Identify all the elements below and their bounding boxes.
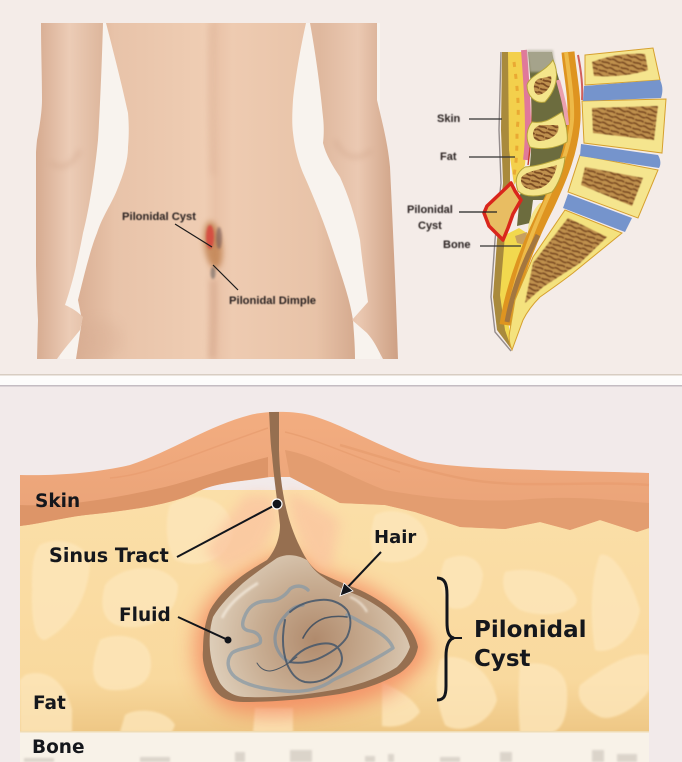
panel: back view of torso — [35, 23, 398, 360]
label: Pilonidal Cyst: Cyst — [418, 220, 442, 232]
skin layer — [20, 412, 649, 532]
panel: spine cross-section — [407, 48, 666, 351]
bone edge — [20, 731, 649, 732]
hair strands — [228, 586, 393, 691]
cyst lesion — [201, 220, 225, 279]
label: Pilonidal Cyst — [474, 617, 587, 672]
right arm — [310, 23, 398, 359]
red muscle line — [528, 60, 532, 165]
torso shading — [208, 280, 218, 359]
label: Pilonidal Cyst: Cyst — [474, 646, 531, 672]
label: Pilonidal Cyst: Pilonidal — [407, 204, 453, 216]
fat dots — [514, 62, 518, 175]
fat layer — [20, 490, 649, 732]
label: Pilonidal Cyst: Pilonidal — [474, 617, 587, 643]
label: Skin — [437, 113, 502, 125]
vertebra marrow — [525, 54, 658, 303]
fluid highlights — [222, 583, 367, 618]
label: Pilonidal Cyst — [407, 204, 497, 232]
dark tissue upper — [517, 52, 569, 226]
elbow shading — [345, 154, 364, 158]
label: Bone: Bone — [443, 239, 470, 251]
label: Fat — [440, 151, 515, 163]
fatty bulge right of tract — [287, 490, 340, 570]
label: Sinus Tract — [49, 499, 282, 567]
label: Fluid — [119, 605, 232, 644]
label: Fat: Fat — [33, 693, 66, 714]
sacral bone inset — [528, 203, 548, 238]
lower fat layer — [500, 228, 533, 350]
bracket — [437, 578, 454, 700]
label: Bone — [443, 239, 521, 251]
label: Skin: Skin — [35, 491, 80, 512]
vertebra bodies — [509, 48, 666, 350]
sinus tract and cyst wall — [203, 412, 418, 702]
label: Skin: Skin — [437, 113, 461, 125]
bracket tip — [452, 637, 462, 639]
skin darker lower band right — [285, 450, 649, 532]
inflammation glow — [195, 555, 430, 715]
label: Hair: Hair — [374, 527, 416, 548]
spinous processes — [516, 60, 567, 196]
panel: skin cross-section — [20, 412, 649, 762]
label: Pilonidal Dimple: Pilonidal Dimple — [229, 295, 316, 307]
cyst — [484, 183, 521, 240]
label: Hair — [340, 527, 416, 596]
label: Pilonidal Cyst — [122, 211, 212, 247]
cyst fluid — [210, 555, 410, 697]
coccyx marrow — [515, 232, 527, 245]
outer skin line — [491, 52, 511, 351]
skin layer — [493, 52, 512, 350]
bone flecks — [24, 750, 637, 762]
tissue fade top — [527, 50, 556, 72]
fatty bulge left of tract — [205, 495, 278, 572]
elbow shading — [60, 153, 79, 168]
label: Sinus Tract: Sinus Tract — [49, 544, 169, 567]
label: Fluid: Fluid — [119, 605, 171, 626]
torso — [76, 23, 355, 359]
pink muscle band — [524, 50, 528, 160]
panel divider — [0, 374, 682, 376]
bone layer — [20, 732, 649, 762]
left arm — [35, 23, 103, 359]
label: Pilonidal Cyst: Pilonidal Cyst — [122, 211, 196, 223]
label: Bone: Bone — [32, 737, 85, 758]
spinal canal — [506, 52, 582, 325]
skin darker lower band — [20, 457, 268, 526]
fat layer — [508, 52, 528, 185]
label: Pilonidal Dimple — [213, 265, 316, 307]
fat globules — [20, 497, 649, 733]
skin strata — [110, 428, 649, 485]
label: Fat: Fat — [440, 151, 457, 163]
discs — [563, 80, 662, 232]
